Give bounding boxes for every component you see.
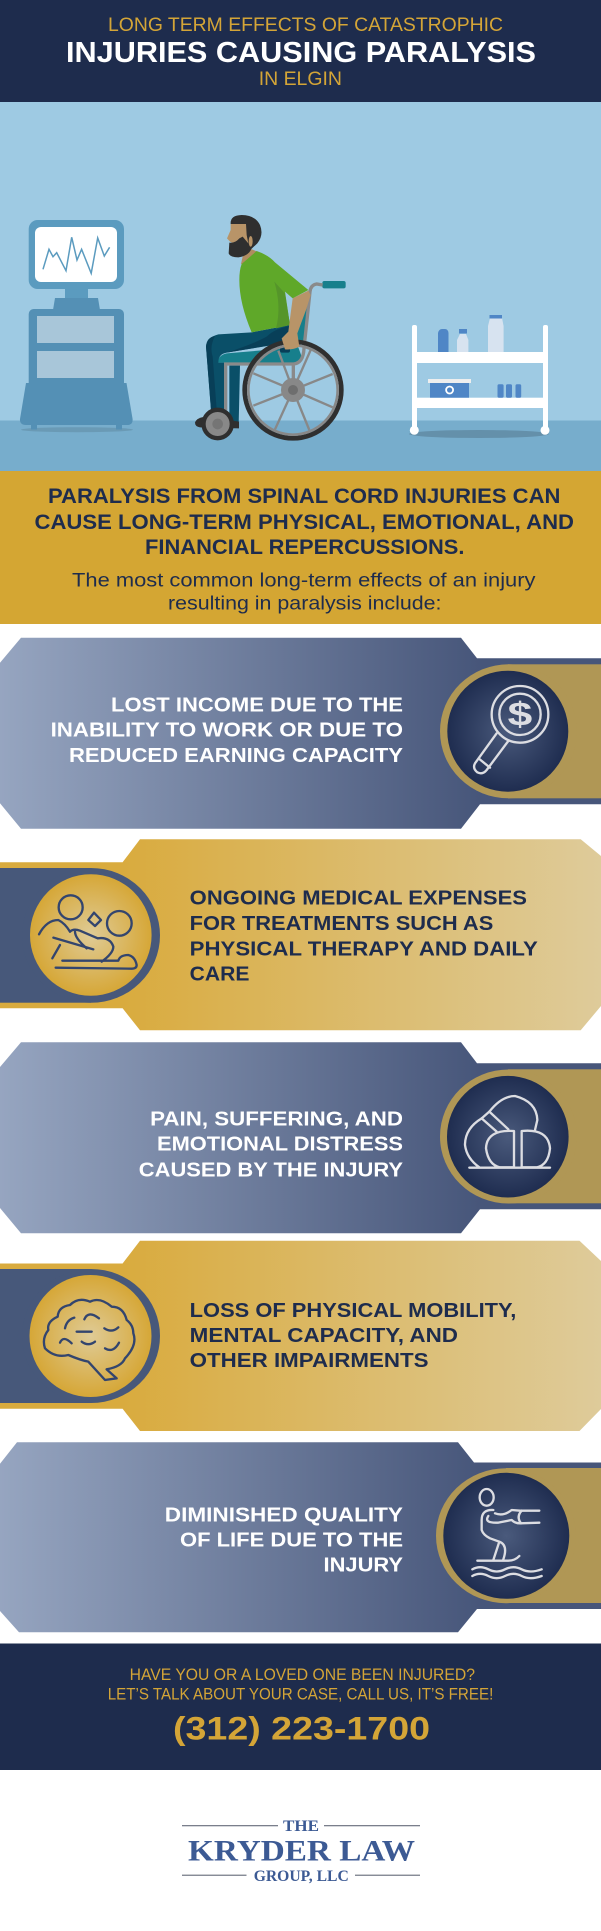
frame [226, 284, 323, 410]
icon: man in wheelchair [195, 215, 346, 440]
footer: call to action: HAVE YOU OR A LOVED ONE BEEN INJURED? [130, 1666, 475, 1684]
text [51, 695, 404, 767]
text: EMOTIONAL DISTRESS [157, 1134, 403, 1156]
title banner: INJURIES CAUSING PARALYSIS [66, 37, 536, 69]
icon: pills [447, 1076, 569, 1197]
text: PHYSICAL THERAPY AND DAILY [190, 938, 539, 960]
text: intro subheading: The most common long-term effects of an injury [72, 570, 536, 592]
title banner: IN ELGIN [259, 68, 342, 90]
text: intro subheading [72, 570, 536, 614]
heading: intro statement: PARALYSIS FROM SPINAL CORD INJURIES CAN [48, 485, 560, 508]
logo: The Kryder Law Group, LLC: THE [283, 1818, 319, 1835]
text: CARE [190, 964, 250, 986]
icon: patient monitor [20, 220, 133, 432]
arm [282, 291, 311, 349]
text: LOST INCOME DUE TO THE [111, 695, 403, 717]
head [227, 215, 261, 265]
text: FOR TREATMENTS SUCH AS [190, 913, 493, 935]
logo: The Kryder Law Group, LLC: GROUP, LLC [254, 1868, 349, 1885]
icon: water skier [443, 1473, 569, 1599]
text: REDUCED EARNING CAPACITY [69, 745, 404, 767]
legs [206, 325, 291, 424]
text: CAUSED BY THE INJURY [139, 1160, 404, 1182]
panel: intro [0, 471, 601, 624]
text: DIMINISHED QUALITY [165, 1504, 404, 1526]
icon: magnifying glass with dollar [447, 671, 568, 792]
icon: medical supply cart [409, 315, 550, 438]
logo: The Kryder Law Group, LLC [182, 1818, 420, 1885]
footer: call to action: LET’S TALK ABOUT YOUR CASE, CALL US, IT’S FREE! [108, 1685, 493, 1703]
text: MENTAL CAPACITY, AND [190, 1325, 458, 1347]
panel: loss of mobility [0, 1241, 601, 1431]
text: INJURY [324, 1554, 404, 1576]
backrest and seat [218, 281, 346, 363]
text: OTHER IMPAIRMENTS [190, 1350, 428, 1372]
torso [239, 251, 308, 332]
panel: pain and suffering [0, 1042, 601, 1233]
logo: The Kryder Law Group, LLC: KRYDER LAW [188, 1834, 415, 1867]
panel: lost income [0, 638, 601, 829]
heading: intro statement: CAUSE LONG-TERM PHYSICAL, EMOTIONAL, AND [34, 511, 574, 534]
illustration: hospital room scene [0, 102, 601, 471]
text: LOSS OF PHYSICAL MOBILITY, [190, 1300, 516, 1322]
text: ONGOING MEDICAL EXPENSES [190, 888, 527, 910]
phone number: (312) 223-1700 [173, 1711, 430, 1747]
main wheel [245, 342, 341, 438]
panel: quality of life [0, 1442, 601, 1632]
title banner: LONG TERM EFFECTS OF CATASTROPHIC [108, 14, 503, 36]
heading: intro statement: FINANCIAL REPERCUSSIONS. [145, 536, 464, 559]
text [190, 888, 539, 986]
text: INABILITY TO WORK OR DUE TO [51, 720, 403, 742]
heading: intro statement [34, 485, 574, 559]
icon: magnifying glass with dollar: $ [508, 697, 533, 734]
text [165, 1504, 404, 1576]
panel: medical expenses [0, 839, 601, 1030]
text [139, 1109, 404, 1182]
text: intro subheading: resulting in paralysis include: [168, 592, 442, 614]
text [190, 1300, 516, 1372]
caster wheel and foot [195, 408, 239, 440]
icon: brain [30, 1275, 152, 1397]
text: OF LIFE DUE TO THE [180, 1530, 403, 1552]
text: PAIN, SUFFERING, AND [150, 1109, 403, 1131]
footer: call to action [0, 1644, 601, 1770]
icon: physical therapy [30, 874, 152, 996]
title banner [0, 0, 601, 102]
